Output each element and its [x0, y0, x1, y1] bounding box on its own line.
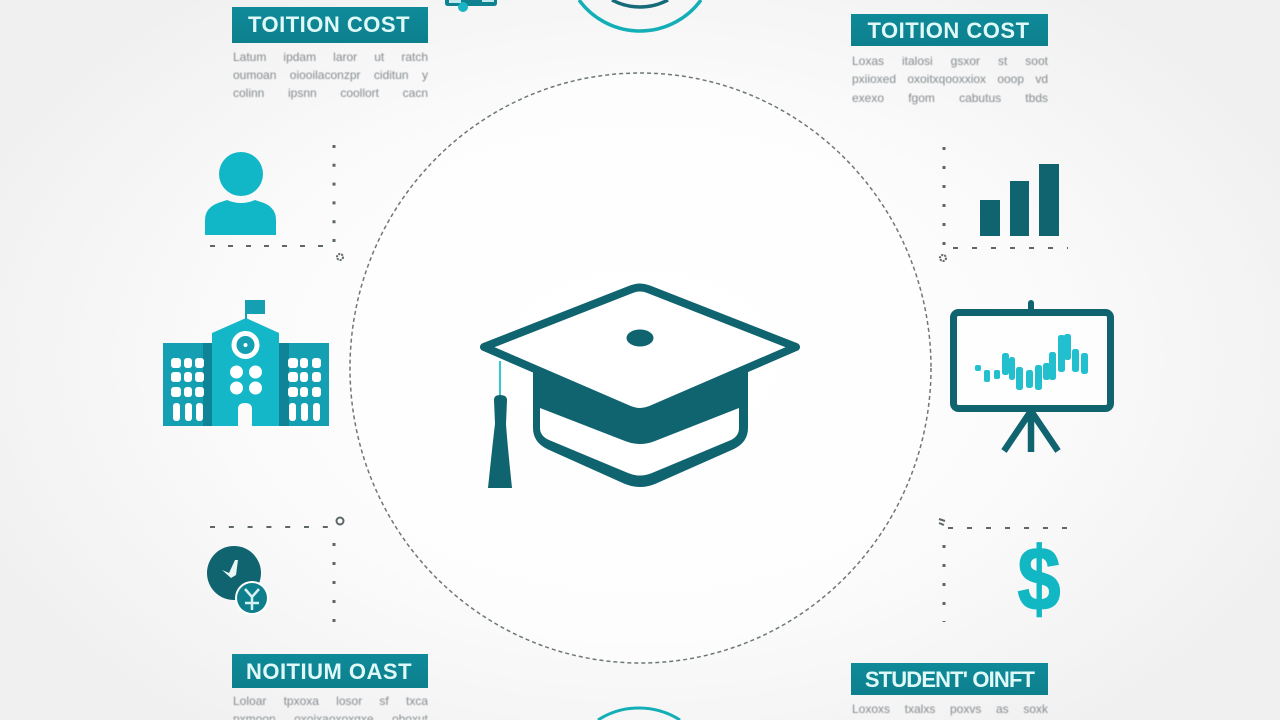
- centre windows: [230, 366, 262, 394]
- panel: top-right tuition cost: [851, 14, 1048, 106]
- icon: person: [205, 152, 276, 235]
- text: top-right line 3: exexo fgom cabutus tbds: [852, 91, 1048, 105]
- dashed bracket: dollar: [939, 519, 1068, 622]
- heading: top-right: [851, 14, 1048, 46]
- tassel: [488, 395, 512, 488]
- heading: bottom-left: NOITIUM OAST: [246, 659, 412, 684]
- panel: top-left tuition cost: [232, 7, 428, 100]
- text: top-left line 1: Latum ipdam laror ut ratch: [233, 50, 428, 64]
- heading: bottom-right: STUDENT' OINFT: [865, 667, 1034, 692]
- top icon fragment: [445, 0, 497, 12]
- text: top-left line 2: oumoan oiooilaconzpr ciditun y: [233, 68, 428, 82]
- dashed bracket: bar chart: [940, 147, 1068, 261]
- heading: bottom-right: [851, 663, 1048, 695]
- text: top-right line 2: pxiioxed oxoitxqooxxiox ooop vd: [852, 72, 1048, 86]
- bar chart icon: [980, 164, 1059, 236]
- tassel cord: [499, 361, 501, 397]
- clock window: [234, 334, 257, 356]
- icon: clock and coin: [207, 546, 269, 615]
- text: top-right line 1: Loxas italosi gsxor st soot: [852, 54, 1048, 68]
- icon: school building: [163, 300, 329, 426]
- panel: bottom-right: [851, 663, 1048, 716]
- text: bottom-left line 1: Loloar tpxoxa losor sf txca: [233, 694, 428, 708]
- text: bottom-right line 1: Loxoxs txalxs poxvs as soxk: [852, 702, 1048, 716]
- central dashed circle: [350, 73, 931, 663]
- icon: presentation board: [954, 303, 1110, 452]
- dashed bracket: person: [210, 145, 343, 260]
- panel: bottom-left: [232, 654, 428, 720]
- icon: graduation cap: [484, 288, 796, 488]
- board chart: [975, 334, 1088, 390]
- heading: bottom-left: [232, 654, 428, 688]
- cap button: [626, 330, 654, 346]
- side windows: [171, 358, 321, 421]
- heading: top-left: TOITION COST: [248, 12, 410, 37]
- icon: dollar sign: $: [1017, 529, 1061, 629]
- heading: top-right: TOITION COST: [867, 18, 1030, 43]
- dashed bracket: clock: [210, 518, 344, 622]
- top circle fragment: [579, 0, 701, 31]
- text: top-left line 3: colinn ipsnn coollort cacn: [233, 86, 428, 100]
- bottom circle fragment: [598, 708, 680, 720]
- heading: top-left: [232, 7, 428, 43]
- flag: [245, 300, 265, 314]
